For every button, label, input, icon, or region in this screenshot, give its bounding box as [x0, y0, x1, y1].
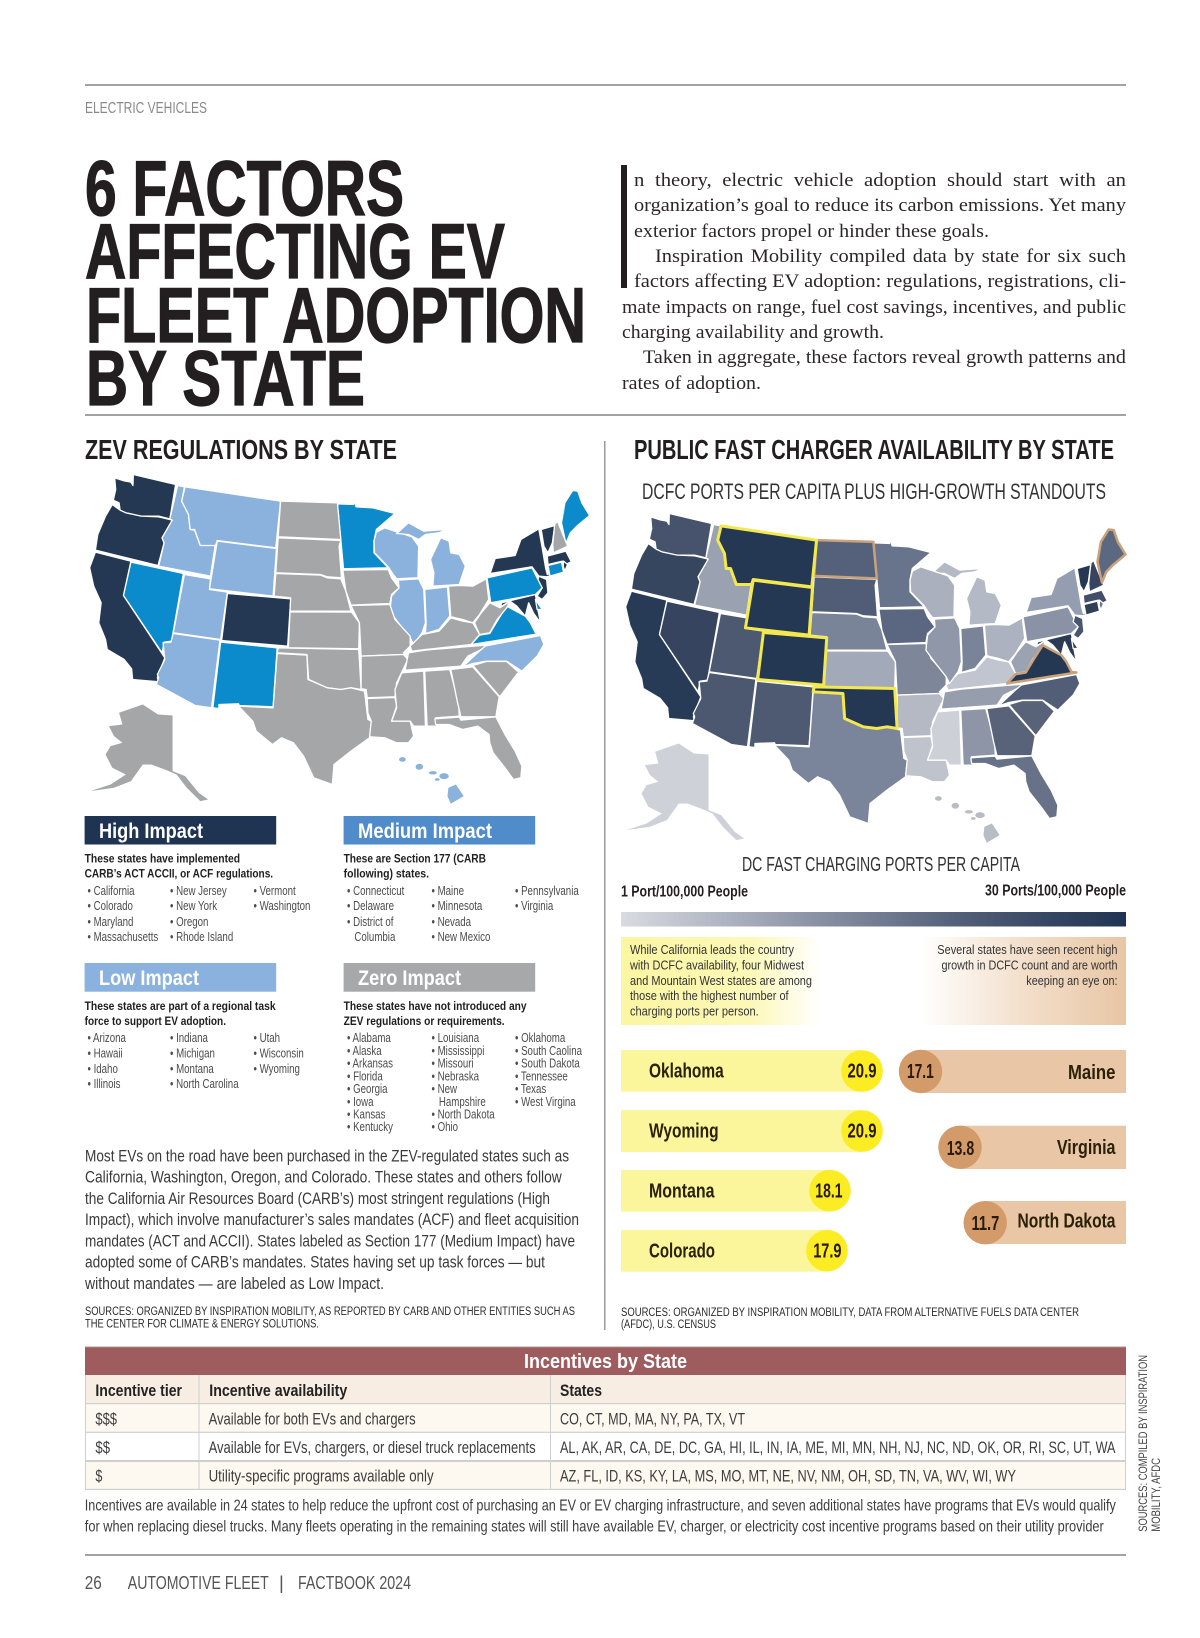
- table header row: States: [560, 1382, 602, 1400]
- low impact states list: • Arizona: [88, 1032, 127, 1045]
- medium impact states list: • Maine: [432, 885, 464, 898]
- table note: [85, 1498, 1116, 1536]
- bar: Virginia: 13.8: [947, 1138, 974, 1160]
- low impact bar: [85, 963, 276, 992]
- zero impact states list: • Iowa: [347, 1096, 374, 1109]
- medium impact states list: • Minnesota: [432, 900, 483, 913]
- intro text: organization’s goal to reduce its carbon emissions. Yet many: [634, 195, 1127, 216]
- zero impact states list: • Texas: [515, 1083, 547, 1096]
- bar: Montana: Montana: [649, 1180, 715, 1202]
- panel: high impact: [85, 816, 310, 944]
- high impact states list: • Maryland: [88, 916, 133, 929]
- intro text: rates of adoption.: [622, 373, 761, 394]
- sources right: [621, 1305, 1079, 1331]
- low impact states list: • North Carolina: [170, 1078, 239, 1091]
- callout: California note: charging ports per person.: [630, 1004, 759, 1019]
- bar: North Dakota: 11.7: [972, 1213, 999, 1235]
- callout: California note: and Mountain West states are among: [630, 973, 812, 988]
- low impact states list: • Hawaii: [88, 1048, 123, 1061]
- high impact states list: [88, 885, 310, 944]
- bar: Oklahoma: [621, 1050, 883, 1092]
- medium impact description: These are Section 177 (CARB: [344, 852, 486, 866]
- rotated sources: SOURCES: COMPILED BY INSPIRATION: [1138, 1355, 1150, 1532]
- table row $$$: Available for both EVs and chargers: [209, 1410, 416, 1428]
- bar: Montana: 18.1: [815, 1180, 842, 1202]
- bar: Maine: [899, 1050, 1126, 1093]
- callout: California note: [621, 937, 821, 1025]
- paragraph: ZEV regulations: California, Washington, Oregon, and Colorado. These states and others follow: [85, 1169, 562, 1187]
- zero impact states list: • Louisiana: [432, 1032, 480, 1045]
- zero impact states list: • Kansas: [347, 1109, 386, 1122]
- zero impact states list: • West Virgina: [515, 1096, 576, 1109]
- callout: high growth note: [920, 937, 1126, 1025]
- medium impact states list: • Delaware: [347, 900, 394, 913]
- sources left: [85, 1304, 575, 1331]
- intro text: n theory, electric vehicle adoption should start with an: [634, 170, 1127, 191]
- zero impact states list: • Alabama: [347, 1032, 391, 1045]
- high impact states list: • New Jersey: [170, 885, 227, 898]
- medium impact states list: • Virginia: [515, 900, 554, 913]
- low impact states list: • Idaho: [88, 1063, 118, 1076]
- low impact states list: [88, 1032, 304, 1091]
- table row $$$: [85, 1404, 1126, 1432]
- high impact states list: • California: [88, 885, 135, 898]
- section label: ELECTRIC VEHICLES: [85, 100, 207, 117]
- column divider: [604, 441, 606, 1330]
- medium impact description: [344, 852, 486, 881]
- sources left: THE CENTER FOR CLIMATE & ENERGY SOLUTIONS.: [85, 1317, 319, 1331]
- map: DC fast charger ports per capita: [626, 513, 1126, 843]
- zero impact states list: • Oklahoma: [515, 1032, 566, 1045]
- zero impact bar: Zero Impact: [358, 967, 461, 990]
- sources right: (AFDC), U.S. CENSUS: [621, 1317, 716, 1331]
- high impact bar: [85, 816, 276, 844]
- paragraph: ZEV regulations: mandates (ACT and ACCII). States labeled as Section 177 (Medium Impact) have: [85, 1233, 575, 1251]
- legend scale low: 1 Port/100,000 People: [621, 884, 748, 901]
- bar: Montana: [621, 1170, 851, 1212]
- callout: California note: While California leads the country: [630, 942, 794, 957]
- bar: Virginia: Virginia: [1057, 1137, 1116, 1159]
- intro text: [621, 165, 1127, 394]
- intro text: Taken in aggregate, these factors reveal growth patterns and: [643, 347, 1127, 368]
- low impact states list: • Wisconsin: [254, 1048, 304, 1061]
- zero impact states list: • Florida: [347, 1071, 383, 1084]
- middle rule: [85, 414, 1126, 416]
- intro text: exterior factors propel or hinder these goals.: [634, 221, 989, 242]
- zero impact states list: • South Dakota: [515, 1058, 580, 1071]
- paragraph: ZEV regulations: Impact), which involve manufacturer’s sales mandates (ACF) and fleet acquisition: [85, 1211, 579, 1229]
- zero impact bar: [344, 963, 535, 992]
- table header row: [85, 1375, 1126, 1404]
- paragraph: ZEV regulations: without mandates — are labeled as Low Impact.: [84, 1275, 384, 1293]
- table row $: AZ, FL, ID, KS, KY, LA, MS, MO, MT, NE, NV, NM, OH, SD, TN, VA, WV, WI, WY: [560, 1468, 1016, 1486]
- callout: California note: those with the highest number of: [630, 988, 789, 1003]
- table header row: Incentive tier: [95, 1382, 182, 1400]
- title: [85, 144, 586, 422]
- zero impact states list: • Nebraska: [432, 1071, 480, 1084]
- callout: California note: with DCFC availability, four Midwest: [629, 958, 804, 973]
- panel: low impact: [85, 963, 304, 1091]
- intro text: Inspiration Mobility compiled data by state for six such: [655, 246, 1127, 267]
- table header row: Incentive availability: [209, 1382, 348, 1400]
- bar: Oklahoma: Oklahoma: [649, 1061, 724, 1083]
- medium impact states list: • Pennsylvania: [515, 885, 579, 898]
- high impact states list: • Oregon: [170, 916, 208, 929]
- sources right: SOURCES: ORGANIZED BY INSPIRATION MOBILITY, DATA FROM ALTERNATIVE FUELS DATA CENTER: [621, 1305, 1079, 1319]
- high impact states list: • Massachusetts: [88, 931, 159, 944]
- table row $: $: [95, 1468, 102, 1486]
- medium impact bar: [344, 816, 535, 844]
- intro text: mate impacts on range, fuel cost savings, incentives, and public: [622, 297, 1126, 318]
- drop cap I: [621, 165, 627, 288]
- medium impact states list: • District of: [347, 916, 394, 929]
- title: FLEET ADOPTION: [86, 271, 586, 359]
- zero impact states list: • Georgia: [347, 1083, 388, 1096]
- medium impact bar: Medium Impact: [358, 820, 492, 843]
- callout: high growth note: Several states have seen recent high: [937, 942, 1118, 957]
- callout: high growth note: growth in DCFC count and are worth: [942, 958, 1118, 973]
- zero impact description: ZEV regulations or requirements.: [344, 1014, 505, 1028]
- sources left: SOURCES: ORGANIZED BY INSPIRATION MOBILITY, AS REPORTED BY CARB AND OTHER ENTITIES SUCH AS: [85, 1304, 575, 1318]
- zero impact description: These states have not introduced any: [344, 999, 527, 1013]
- medium impact states list: • Connecticut: [347, 885, 405, 898]
- high impact description: CARB’s ACT ACCII, or ACF regulations.: [85, 867, 273, 881]
- high impact states list: • Vermont: [254, 885, 296, 898]
- table row $: Utility-specific programs available only: [209, 1468, 434, 1486]
- high impact description: [85, 852, 273, 881]
- bar: Wyoming: Wyoming: [649, 1120, 719, 1142]
- paragraph: ZEV regulations: [84, 1148, 579, 1293]
- low impact bar: Low Impact: [99, 967, 199, 990]
- bar: North Dakota: [964, 1201, 1126, 1244]
- zero impact states list: • Kentucky: [347, 1121, 393, 1134]
- zero impact states list: • Alaska: [347, 1045, 382, 1058]
- zero impact states list: • New: [432, 1083, 458, 1096]
- footer: AUTOMOTIVE FLEET: [128, 1572, 269, 1593]
- paragraph: ZEV regulations: adopted some of CARB’s mandates. States having set up task forces — but: [85, 1254, 545, 1272]
- bar: Wyoming: [621, 1110, 883, 1152]
- high impact states list: • Colorado: [88, 900, 133, 913]
- footer: FACTBOOK 2024: [298, 1572, 411, 1593]
- callout: high growth note: keeping an eye on:: [1026, 973, 1118, 988]
- table title bar: [85, 1346, 1126, 1375]
- footer: [85, 1572, 411, 1593]
- title: AFFECTING EV: [85, 207, 505, 295]
- zero impact states list: • Tennessee: [515, 1071, 568, 1084]
- zero impact states list: [347, 1032, 583, 1134]
- zero impact description: [344, 999, 527, 1028]
- footer: 26: [85, 1572, 102, 1593]
- table row $$: Available for EVs, chargers, or diesel truck replacements: [209, 1439, 536, 1457]
- low impact description: [85, 999, 276, 1028]
- footer: |: [279, 1572, 284, 1593]
- table row $$: $$: [95, 1439, 110, 1457]
- panel: zero impact: [344, 963, 583, 1134]
- zero impact states list: • Arkansas: [347, 1058, 393, 1071]
- low impact states list: • Montana: [170, 1063, 214, 1076]
- high impact bar: High Impact: [99, 820, 203, 843]
- low impact states list: • Michigan: [170, 1048, 215, 1061]
- legend title: DC FAST CHARGING PORTS PER CAPITA: [742, 854, 1020, 876]
- table row $$$: $$$: [95, 1410, 117, 1428]
- high impact states list: • Rhode Island: [170, 931, 233, 944]
- table row $: [85, 1461, 1126, 1489]
- rotated sources: MOBILITY, AFDC: [1151, 1458, 1163, 1532]
- table: incentives by state: [85, 1346, 1126, 1490]
- medium impact states list: Columbia: [354, 931, 396, 944]
- bar: Maine: Maine: [1068, 1062, 1115, 1084]
- zero impact states list: • Ohio: [432, 1121, 458, 1134]
- zero impact states list: • South Caolina: [515, 1045, 583, 1058]
- medium impact states list: • New Mexico: [432, 931, 490, 944]
- bar: Colorado: 17.9: [813, 1240, 842, 1262]
- top rule: [85, 84, 1126, 86]
- rotated sources: [1138, 1355, 1163, 1532]
- bar: Colorado: Colorado: [649, 1240, 715, 1262]
- bottom rule: [85, 1554, 1126, 1556]
- bar: Wyoming: 20.9: [848, 1120, 876, 1142]
- map: ZEV regulations by state: [90, 474, 590, 804]
- gradient legend bar: [621, 912, 1126, 926]
- paragraph: ZEV regulations: the California Air Resources Board (CARB’s) most stringent regulations (High: [85, 1190, 550, 1208]
- high impact description: These states have implemented: [85, 852, 240, 866]
- table row $$$: CO, CT, MD, MA, NY, PA, TX, VT: [560, 1410, 745, 1428]
- medium impact states list: [347, 885, 579, 944]
- legend scale high: 30 Ports/100,000 People: [985, 883, 1126, 900]
- bar: North Dakota: North Dakota: [1018, 1211, 1116, 1233]
- bar: Maine: 17.1: [907, 1061, 934, 1083]
- low impact states list: • Indiana: [170, 1032, 209, 1045]
- intro text: factors affecting EV adoption: regulations, registrations, cli-: [634, 271, 1126, 292]
- bar: Oklahoma: 20.9: [848, 1061, 876, 1083]
- high impact states list: • New York: [170, 900, 217, 913]
- zero impact states list: • North Dakota: [432, 1109, 495, 1122]
- table row $$: [85, 1432, 1126, 1460]
- zero impact states list: • Missouri: [432, 1058, 474, 1071]
- low impact description: These states are part of a regional task: [85, 999, 276, 1013]
- medium impact states list: • Nevada: [432, 916, 472, 929]
- panel: medium impact: [344, 816, 579, 944]
- zero impact states list: Hampshire: [439, 1096, 486, 1109]
- paragraph: ZEV regulations: Most EVs on the road have been purchased in the ZEV-regulated states such as: [85, 1148, 569, 1166]
- low impact states list: • Wyoming: [254, 1063, 300, 1076]
- low impact states list: • Illinois: [88, 1078, 121, 1091]
- low impact states list: • Utah: [254, 1032, 280, 1045]
- heading: ZEV regulations: ZEV REGULATIONS BY STATE: [85, 434, 397, 465]
- title: BY STATE: [86, 334, 365, 422]
- high impact states list: • Washington: [254, 900, 310, 913]
- table title bar: Incentives by State: [524, 1351, 687, 1373]
- bar: Colorado: [621, 1230, 848, 1272]
- bar: Virginia: [938, 1126, 1126, 1169]
- zero impact states list: • Mississippi: [432, 1045, 484, 1058]
- medium impact description: following) states.: [344, 867, 429, 881]
- title: 6 FACTORS: [85, 144, 404, 232]
- low impact description: force to support EV adoption.: [85, 1014, 226, 1028]
- intro text: charging availability and growth.: [622, 322, 884, 343]
